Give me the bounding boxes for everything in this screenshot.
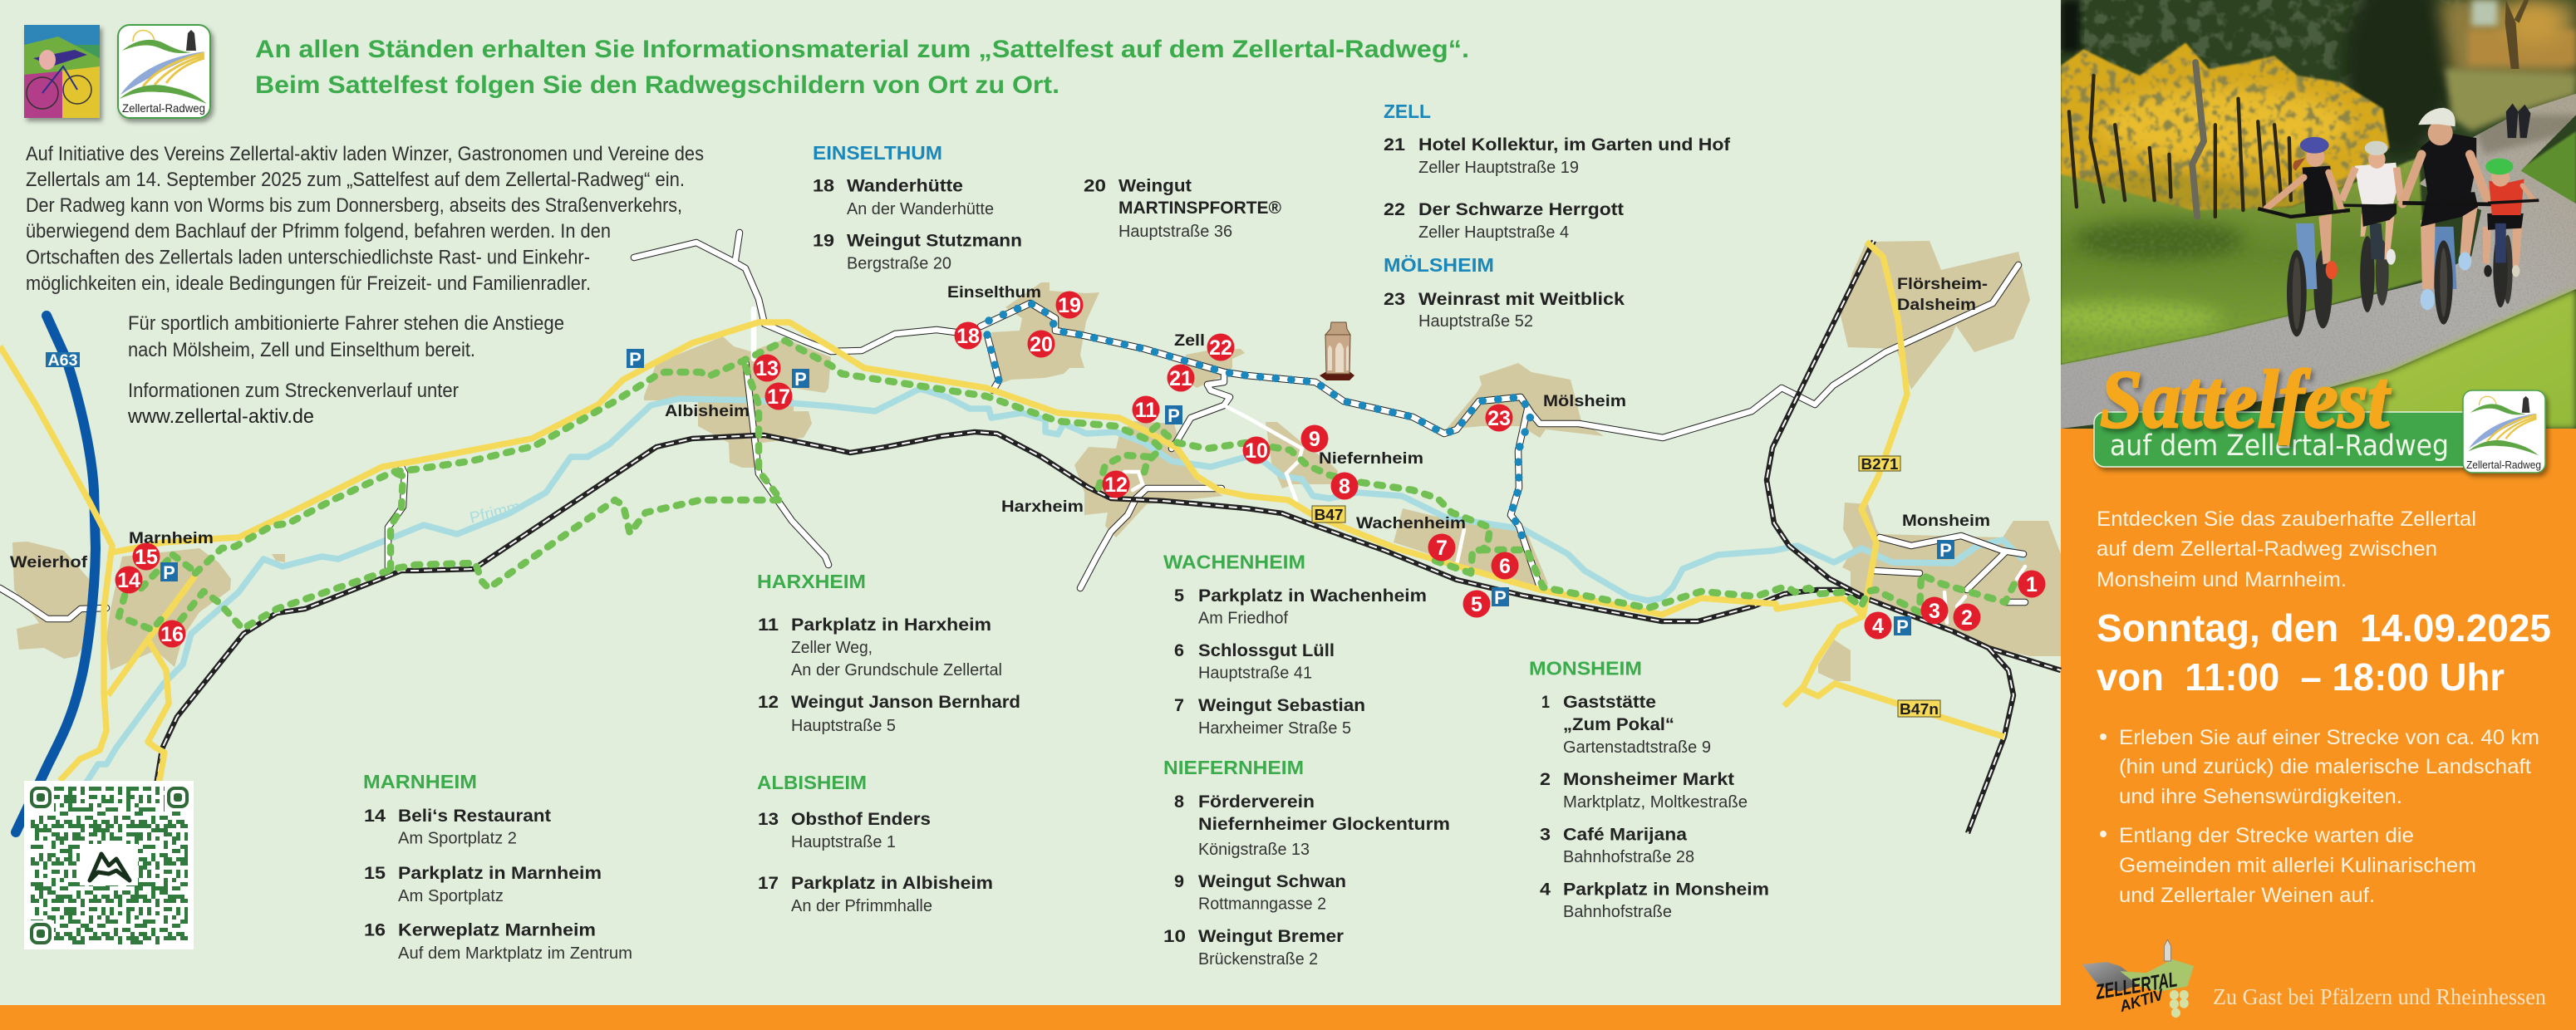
heading	[255, 36, 1469, 99]
place names: Zell	[1174, 332, 1205, 350]
panel: Marnheim: 15	[364, 863, 386, 883]
panel: Albisheim: Obsthof Enders	[791, 809, 931, 829]
panel: Einselthum: Wanderhütte	[847, 176, 963, 196]
panel: Marnheim: Parkplatz in Marnheim	[398, 863, 602, 883]
map	[0, 233, 2061, 833]
panel: Monsheim: 2	[1540, 769, 1551, 789]
panel: Zell: 22	[1384, 199, 1405, 219]
panel: Marnheim: Kerweplatz Marnheim	[398, 920, 596, 940]
intro text: überwiegend dem Bachlauf der Pfrimm folgend, befahren werden. In den	[26, 220, 611, 243]
panel: Harxheim: HARXHEIM	[757, 571, 866, 592]
panel: Zell: Der Schwarze Herrgott	[1418, 199, 1624, 219]
panel: Marnheim: Auf dem Marktplatz im Zentrum	[398, 944, 632, 963]
numbered location markers: 21	[1169, 367, 1192, 390]
panel: Wachenheim	[1163, 552, 1427, 738]
text: discover intro: Monsheim und Marnheim.	[2097, 568, 2347, 591]
logo: Zellertal-Radweg: Zellertal-Radweg	[122, 101, 205, 115]
bullet: route: und ihre Sehenswürdigkeiten.	[2119, 785, 2402, 808]
panel: Einselthum: Hauptstraße 36	[1118, 223, 1232, 241]
numbered location markers: 22	[1209, 336, 1232, 360]
parking signs	[160, 349, 1954, 637]
panel: Zell: ZELL	[1384, 101, 1431, 122]
place names: Harxheim	[1001, 498, 1084, 516]
panel: Monsheim: 3	[1540, 824, 1551, 844]
panel: Niefernheim: 8	[1174, 792, 1184, 812]
panel: Harxheim: Parkplatz in Harxheim	[791, 615, 991, 635]
riders	[2258, 108, 2539, 336]
panel: Marnheim: MARNHEIM	[363, 771, 477, 792]
panel: Niefernheim	[1163, 757, 1450, 969]
place names: Wachenheim	[1356, 515, 1466, 532]
bullet: food and wine: Entlang der Strecke warten die	[2119, 824, 2414, 847]
numbered location markers: 4	[1872, 615, 1884, 638]
numbered location markers: 17	[767, 385, 790, 409]
panel: Niefernheim: 10	[1163, 926, 1186, 946]
date and time: Sonntag, den 14.09.2025	[2097, 606, 2551, 650]
bullet: food and wine	[2100, 824, 2476, 907]
date and time: von 11:00 – 18:00 Uhr	[2097, 655, 2505, 699]
panel: Monsheim: 4	[1540, 879, 1551, 899]
numbered location markers: 11	[1135, 399, 1157, 422]
panel: Albisheim: Hauptstraße 1	[791, 833, 896, 851]
panel: Monsheim: Parkplatz in Monsheim	[1563, 879, 1769, 899]
numbered location markers	[115, 291, 2046, 648]
panel: Harxheim: An der Grundschule Zellertal	[791, 661, 1002, 679]
icon: tower	[1320, 322, 1354, 380]
numbered location markers: 8	[1339, 475, 1350, 498]
text: sporty riders and website: Für sportlich ambitionierte Fahrer stehen die Anstiege	[128, 312, 564, 335]
parking signs: P	[1896, 616, 1909, 637]
town areas	[12, 241, 2061, 681]
panel: Harxheim: Hauptstraße 5	[791, 717, 896, 735]
route: blue climb path	[987, 303, 1531, 547]
place names: Weierhof	[10, 554, 88, 571]
text: discover intro: Entdecken Sie das zauberhafte Zellertal	[2097, 508, 2476, 531]
place names: Mölsheim	[1543, 393, 1626, 410]
white side roads	[0, 233, 2025, 623]
numbered location markers: 9	[1309, 428, 1320, 451]
numbered location markers: 16	[160, 623, 184, 646]
panel: Monsheim: Monsheimer Markt	[1563, 769, 1734, 789]
panel: Monsheim	[1529, 658, 1769, 921]
panel: Einselthum: Weingut	[1118, 176, 1192, 196]
panel: Marnheim: 16	[364, 920, 386, 940]
bullet: food and wine: und Zellertaler Weinen auf.	[2119, 884, 2375, 907]
panel: Mölsheim: MÖLSHEIM	[1384, 254, 1494, 276]
panel: Mölsheim: Weinrast mit Weitblick	[1418, 289, 1625, 309]
river Pfrimm	[85, 389, 2022, 785]
bullet: food and wine: Gemeinden mit allerlei Kulinarischem	[2119, 854, 2476, 877]
panel: Marnheim: Am Sportplatz	[398, 887, 504, 905]
QR code	[24, 781, 194, 949]
motorway A63	[16, 316, 96, 832]
panel: Zell	[1384, 101, 1731, 242]
place names: Marnheim	[129, 530, 214, 547]
icon: painting of cyclist	[24, 25, 100, 118]
panel: Wachenheim: Harxheimer Straße 5	[1198, 719, 1351, 738]
logo: Zellertal Aktiv	[2082, 939, 2194, 1018]
text: discover intro: auf dem Zellertal-Radweg zwischen	[2097, 537, 2437, 561]
bullet: route: Erleben Sie auf einer Strecke von ca. 40 km	[2119, 726, 2539, 749]
road label: B47: B47	[1315, 507, 1343, 523]
parking signs: P	[629, 349, 642, 370]
panel: Zell: Zeller Hauptstraße 19	[1418, 159, 1579, 177]
panel: Monsheim: „Zum Pokal“	[1563, 714, 1674, 734]
intro text: Auf Initiative des Vereins Zellertal-aktiv laden Winzer, Gastronomen und Vereine des	[26, 143, 704, 165]
panel: Harxheim: 12	[758, 692, 779, 712]
parking signs: P	[1494, 587, 1507, 608]
walkers in distance	[2506, 104, 2530, 138]
parking signs: P	[1939, 540, 1952, 561]
rider: man in black	[2402, 108, 2491, 325]
parking signs: P	[163, 562, 175, 583]
panel: Zell: 21	[1384, 135, 1405, 154]
panel: Albisheim	[757, 772, 993, 915]
numbered location markers: 15	[135, 546, 158, 569]
panel: Harxheim: Weingut Janson Bernhard	[791, 692, 1020, 712]
place names: Albisheim	[665, 403, 750, 420]
banner: Sattelfest title: auf dem Zellertal-Radweg	[2110, 429, 2449, 463]
panel: Wachenheim: Parkplatz in Wachenheim	[1198, 586, 1427, 606]
panel: Einselthum: EINSELTHUM	[813, 142, 942, 164]
panel: Monsheim: 1	[1541, 692, 1550, 712]
panel: Marnheim: Beli‘s Restaurant	[398, 806, 551, 826]
panel: Harxheim	[757, 571, 1020, 735]
panel: Monsheim: Gartenstadtstraße 9	[1563, 738, 1711, 757]
panel: Niefernheim: Weingut Bremer	[1198, 926, 1345, 946]
numbered location markers: 6	[1499, 555, 1511, 578]
orange side panel	[2061, 429, 2576, 1030]
panel: Einselthum	[813, 142, 1281, 272]
panel: Niefernheim: 9	[1174, 871, 1184, 891]
left meadow	[2061, 158, 2423, 365]
panel: Wachenheim: 6	[1174, 640, 1184, 660]
place names: Flörsheim-	[1897, 276, 1988, 293]
place names: Niefernheim	[1319, 450, 1423, 468]
numbered location markers: 12	[1104, 473, 1128, 497]
railway lines	[156, 241, 2061, 833]
banner: Sattelfest title: Sattelfest	[2100, 353, 2392, 445]
panel: Mölsheim	[1384, 254, 1625, 331]
bottom orange bar	[0, 1005, 2061, 1030]
heading: Beim Sattelfest folgen Sie den Radwegschildern von Ort zu Ort.	[255, 71, 1059, 99]
numbered location markers: 20	[1030, 333, 1053, 356]
logo: Zellertal Aktiv: AKTIV	[2117, 985, 2166, 1015]
road label: B47n: B47n	[1900, 701, 1939, 718]
panel: Niefernheim: Rottmanngasse 2	[1198, 895, 1326, 914]
panel: Monsheim: Marktplatz, Moltkestraße	[1563, 793, 1748, 812]
panel: Wachenheim: 7	[1174, 695, 1184, 715]
panel: Niefernheim: Königstraße 13	[1198, 841, 1310, 859]
gravel path	[2061, 89, 2576, 430]
panel: Monsheim: Gaststätte	[1563, 692, 1656, 712]
logo: Zellertal-Radweg small: Zellertal-Radweg	[2466, 459, 2541, 471]
intro text: Zellertals am 14. September 2025 zum „Sattelfest auf dem Zellertal-Radweg“ ein.	[26, 169, 685, 191]
panel: Albisheim: 13	[758, 809, 779, 829]
bullet: route	[2100, 726, 2539, 808]
panel: Albisheim: ALBISHEIM	[757, 772, 867, 793]
panel: Mölsheim: Hauptstraße 52	[1418, 312, 1533, 331]
numbered location markers: 19	[1058, 294, 1081, 317]
panel: Wachenheim: WACHENHEIM	[1163, 552, 1305, 573]
photo: family cycling through vineyards	[2025, 0, 2576, 430]
panel: Wachenheim: 5	[1174, 586, 1184, 606]
banner: Sattelfest title	[2094, 353, 2485, 467]
panel: Monsheim: Bahnhofstraße 28	[1563, 848, 1694, 866]
panel: Zell: Hotel Kollektur, im Garten und Hof	[1418, 135, 1731, 154]
place names: Einselthum	[947, 284, 1041, 302]
place names: Dalsheim	[1897, 297, 1976, 314]
background trees and hills	[2061, 0, 2576, 205]
panel: Niefernheim: NIEFERNHEIM	[1163, 757, 1304, 778]
panel: Wachenheim: Weingut Sebastian	[1198, 695, 1365, 715]
numbered location markers: 23	[1487, 407, 1511, 430]
panel: Albisheim: An der Pfrimmhalle	[791, 897, 932, 915]
numbered location markers: 3	[1929, 600, 1940, 623]
route: green cycle path	[119, 341, 2017, 630]
panel: Niefernheim: Brückenstraße 2	[1198, 950, 1318, 969]
bullet: route: (hin und zurück) die malerische Landschaft	[2119, 755, 2531, 778]
numbered location markers: 2	[1961, 606, 1973, 630]
rider: girl in black	[2258, 137, 2350, 336]
road label: B271: B271	[1861, 456, 1898, 473]
numbered location markers: 5	[1471, 593, 1482, 616]
heading: An allen Ständen erhalten Sie Informationsmaterial zum „Sattelfest auf dem Zellertal-Radweg“.	[255, 36, 1469, 63]
tagline: Zu Gast bei Pfälzern und Rheinhessen	[2213, 984, 2546, 1009]
panel: Marnheim: 14	[364, 806, 386, 826]
place names: Monsheim	[1902, 513, 1990, 530]
text: sporty riders and website	[127, 312, 564, 428]
text: sporty riders and website: nach Mölsheim, Zell und Einselthum bereit.	[128, 339, 475, 361]
logo: Zellertal-Radweg small	[2463, 390, 2545, 473]
numbered location markers: 14	[117, 569, 140, 592]
date and time	[2097, 606, 2551, 699]
panel: Einselthum: 20	[1084, 176, 1106, 196]
panel: Niefernheim: Weingut Schwan	[1198, 871, 1346, 891]
numbered location markers: 10	[1245, 439, 1268, 463]
numbered location markers: 1	[2026, 573, 2038, 596]
panel: Albisheim: 17	[758, 873, 779, 893]
panel: Niefernheim: Niefernheimer Glockenturm	[1198, 814, 1450, 834]
panel: Einselthum: Weingut Stutzmann	[847, 231, 1022, 251]
panel: Einselthum: An der Wanderhütte	[847, 200, 994, 218]
panel: Wachenheim: Hauptstraße 41	[1198, 665, 1312, 683]
numbered location markers: 18	[956, 325, 980, 348]
panel: Albisheim: Parkplatz in Albisheim	[791, 873, 993, 893]
page background	[0, 0, 2061, 1030]
text: discover intro	[2097, 508, 2476, 591]
river label: Pfrimm	[468, 498, 522, 527]
intro text	[26, 143, 704, 295]
vineyard	[2061, 39, 2392, 213]
text: sporty riders and website: Informationen zum Streckenverlauf unter	[128, 380, 459, 402]
text: sporty riders and website: www.zellertal-aktiv.de	[127, 405, 314, 428]
panel: Marnheim: Am Sportplatz 2	[398, 829, 517, 847]
panel: Mölsheim: 23	[1384, 289, 1405, 309]
logo: Zellertal Aktiv: ZELLERTAL	[2093, 968, 2179, 1004]
panel: Harxheim: 11	[758, 615, 779, 635]
intro text: möglichkeiten ein, ideale Bedingungen für Freizeit- und Familienradler.	[26, 272, 591, 295]
panel: Einselthum: Bergstraße 20	[847, 254, 951, 272]
yellow main roads	[0, 242, 2004, 785]
rider: boy in red	[2483, 159, 2539, 307]
motorway A63: A63	[48, 352, 78, 370]
place names	[10, 276, 1990, 571]
panel: Zell: Zeller Hauptstraße 4	[1418, 223, 1569, 242]
panel: Monsheim: Café Marijana	[1563, 824, 1688, 844]
intro text: Der Radweg kann von Worms bis zum Donnersberg, abseits des Straßenverkehrs,	[26, 194, 682, 217]
right bright meadow	[2317, 289, 2576, 429]
numbered location markers: 7	[1436, 537, 1448, 560]
panel: Monsheim: Bahnhofstraße	[1563, 903, 1672, 921]
panel: Niefernheim: Förderverein	[1198, 792, 1315, 812]
parking signs: P	[1168, 405, 1180, 426]
parking signs: P	[794, 369, 807, 390]
rider: woman in white	[2342, 141, 2401, 312]
numbered location markers: 13	[755, 357, 779, 380]
logo: Zellertal-Radweg	[118, 25, 210, 118]
panel: Einselthum: 19	[813, 231, 834, 251]
panel: Marnheim	[363, 771, 632, 963]
intro text: Ortschaften des Zellertals laden unterschiedlichste Rast- und Einkehr-	[26, 246, 590, 269]
panel: Wachenheim: Schlossgut Lüll	[1198, 640, 1335, 660]
panel: Einselthum: 18	[813, 176, 834, 196]
panel: Einselthum: MARTINSPFORTE®	[1118, 198, 1281, 218]
panel: Monsheim: MONSHEIM	[1529, 658, 1642, 679]
panel: Harxheim: Zeller Weg,	[791, 639, 873, 657]
vine posts	[2069, 62, 2291, 217]
panel: Wachenheim: Am Friedhof	[1198, 610, 1288, 628]
